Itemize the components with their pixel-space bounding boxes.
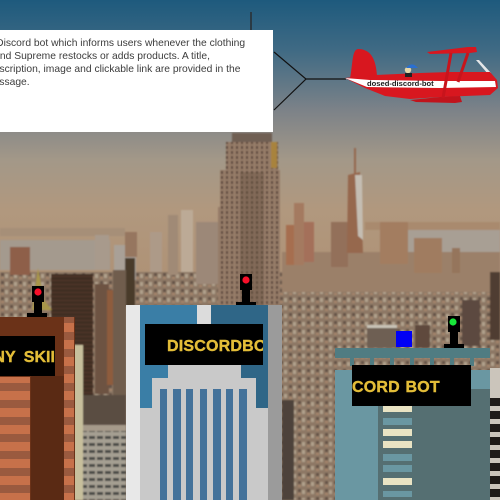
dark towers right [282, 272, 500, 500]
lower wing [410, 96, 462, 103]
fuselage [345, 72, 498, 99]
landmark: One World Trade Center [347, 148, 363, 253]
white stripe [345, 78, 496, 88]
background: photographic skyline [0, 133, 500, 500]
building: right teal [325, 316, 490, 500]
building: middle blue and gray [126, 274, 282, 500]
striped tower at right edge [490, 368, 500, 500]
tail fin [350, 49, 377, 79]
struts [443, 53, 468, 98]
propeller [476, 60, 491, 74]
plane [345, 47, 498, 103]
blue square [396, 331, 412, 347]
landmark: Empire State Building [218, 133, 280, 307]
far water and shoreline [0, 222, 500, 274]
sign: left building [0, 336, 55, 376]
sign: right building [352, 365, 471, 406]
traffic light: red [236, 274, 256, 305]
traffic light: red [27, 286, 47, 317]
plane label: dosed-discord-bot [367, 79, 434, 88]
sign: right building: DISCORD BOT [325, 379, 440, 396]
window lights [383, 406, 412, 497]
dense city [0, 203, 500, 500]
upper wing [427, 47, 477, 54]
dark towers left [32, 258, 135, 500]
building: left brown [0, 286, 75, 500]
connector lines: banner to plane [274, 52, 346, 110]
antenna above text box [250, 12, 252, 30]
traffic light: green [444, 316, 464, 348]
sign: middle building: DISCORDBOT [167, 338, 277, 355]
text box [0, 30, 273, 132]
pilot [405, 64, 418, 77]
sign: middle building [145, 324, 263, 365]
